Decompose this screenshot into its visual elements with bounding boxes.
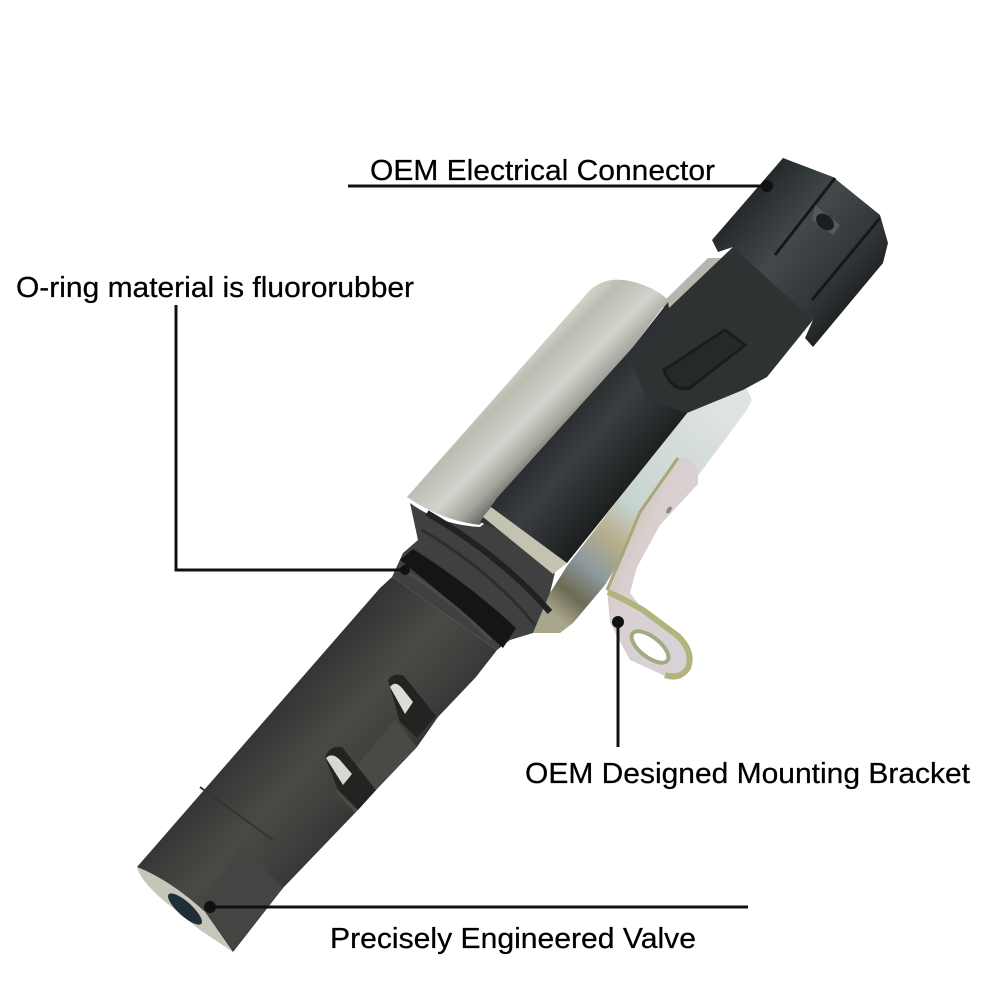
callout: OEM Designed Mounting Bracket <box>525 616 970 790</box>
body lighter band and seam <box>200 720 417 840</box>
callout: O-ring material: O-ring material is fluororubber <box>16 272 415 304</box>
solenoid valve product illustration <box>137 158 888 952</box>
mounting plate <box>533 385 752 633</box>
upper oil port <box>388 675 436 738</box>
callout: Precisely Engineered Valve: Precisely Engineered Valve <box>330 923 696 955</box>
lower oil port <box>325 747 376 810</box>
connector head <box>712 158 888 347</box>
wrench flat <box>203 847 283 950</box>
callout: OEM Designed Mounting Bracket: OEM Designed Mounting Bracket <box>525 758 970 790</box>
callout: OEM Electrical Connector: OEM Electrical Connector <box>370 155 716 187</box>
connector neck <box>633 245 813 413</box>
callout: O-ring material <box>16 272 415 575</box>
connector latch details <box>664 330 745 389</box>
callout: Precisely Engineered Valve <box>204 901 748 955</box>
silver sliver behind neck <box>660 258 722 318</box>
silver metal can <box>407 280 668 525</box>
black coil cover <box>480 302 688 563</box>
valve body <box>137 577 497 952</box>
end face <box>137 867 233 952</box>
collar and o-ring <box>392 503 556 650</box>
silver retaining band <box>483 507 567 574</box>
mounting bracket tab with ring <box>607 458 698 678</box>
callout: OEM Electrical Connector <box>348 155 773 192</box>
